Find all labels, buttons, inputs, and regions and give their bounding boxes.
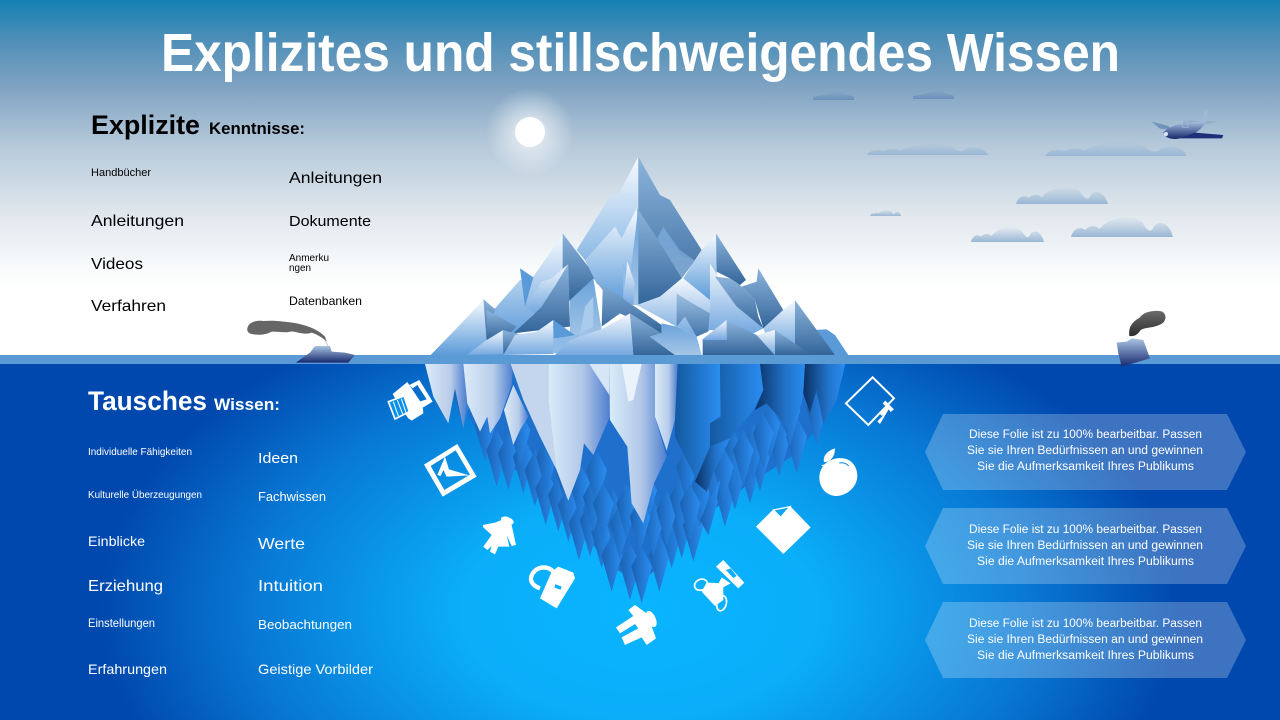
right dark ice columns bbox=[675, 364, 721, 480]
callout 2: Diese Folie ist zu 100% bearbeitbar. Passen bbox=[969, 524, 1202, 536]
item: Datenbanken bbox=[289, 294, 362, 308]
callout 2: Sie die Aufmerksamkeit Ihres Publikums bbox=[977, 556, 1194, 568]
item: Beobachtungen bbox=[258, 617, 352, 632]
background: white lower sky bbox=[0, 289, 1280, 357]
title: Explizites und stillschweigendes Wissen bbox=[161, 23, 1120, 83]
item bbox=[289, 253, 329, 274]
subheading: tacit: Wissen: bbox=[214, 395, 280, 414]
callout 1: Sie sie Ihren Bedürfnissen an und gewinnen bbox=[967, 445, 1203, 457]
background: sea bbox=[0, 363, 1280, 720]
horizon band bbox=[0, 355, 1280, 364]
callout 3: Sie sie Ihren Bedürfnissen an und gewinnen bbox=[967, 634, 1203, 646]
item: Anmerku bbox=[289, 253, 329, 264]
icon: trophy bbox=[693, 560, 744, 612]
main peak dark face bbox=[638, 157, 702, 305]
item: Erziehung bbox=[88, 578, 163, 595]
icon: apple bbox=[819, 448, 857, 496]
icon: airplane bbox=[1152, 108, 1223, 139]
item: Werte bbox=[258, 536, 305, 553]
front ice blocks bbox=[467, 330, 503, 355]
icon: monitor bbox=[846, 377, 894, 425]
heading: tacit: Tausches bbox=[88, 386, 207, 416]
item: Einblicke bbox=[88, 533, 145, 549]
item: Intuition bbox=[258, 578, 323, 595]
item: Anleitungen bbox=[289, 170, 382, 187]
panel: tacit knowledge bbox=[88, 386, 373, 677]
callout 1: Diese Folie ist zu 100% bearbeitbar. Passen bbox=[969, 429, 1202, 441]
iceberg above water bbox=[431, 157, 848, 355]
main peak light face bbox=[577, 157, 638, 305]
callout 3: Diese Folie ist zu 100% bearbeitbar. Passen bbox=[969, 618, 1202, 630]
dark shards bbox=[453, 367, 835, 603]
item: Ideen bbox=[258, 450, 298, 467]
subheading: explicit: Kenntnisse: bbox=[209, 119, 305, 138]
icon: envelope diamond bbox=[756, 507, 811, 554]
left ship with smoke bbox=[247, 321, 355, 363]
icon: person with dress bbox=[483, 515, 516, 554]
light ice shards bbox=[425, 364, 467, 428]
item: Geistige Vorbilder bbox=[258, 661, 373, 677]
left notch bbox=[520, 268, 533, 307]
background: sky bbox=[0, 0, 1280, 290]
right ship with smoke bbox=[1117, 311, 1165, 367]
mid left ridge bbox=[525, 264, 568, 313]
item: Handbücher bbox=[91, 167, 151, 179]
inner peak light bbox=[585, 208, 638, 305]
callout 3: Sie die Aufmerksamkeit Ihres Publikums bbox=[977, 650, 1194, 662]
callout 2: Sie sie Ihren Bedürfnissen an und gewinnen bbox=[967, 540, 1203, 552]
clouds bbox=[813, 91, 1187, 242]
item: Individuelle Fähigkeiten bbox=[88, 446, 192, 458]
panel: explicit knowledge bbox=[91, 110, 382, 315]
left shoulder dark bbox=[563, 233, 596, 302]
icon: person with shirt bbox=[616, 605, 659, 645]
left shoulder light bbox=[487, 233, 563, 340]
callout 1 bbox=[925, 414, 1246, 490]
item: Anleitungen bbox=[91, 213, 184, 230]
icon: padlock bbox=[531, 567, 575, 608]
far right slope bbox=[813, 329, 848, 355]
item: Erfahrungen bbox=[88, 661, 167, 677]
icon: checkbox bbox=[424, 444, 477, 497]
left base slope bbox=[431, 300, 520, 355]
item: Dokumente bbox=[289, 213, 371, 230]
callout 3 bbox=[925, 602, 1246, 678]
iceberg underwater backing bbox=[425, 364, 845, 580]
callout 1: Sie die Aufmerksamkeit Ihres Publikums bbox=[977, 461, 1194, 473]
iceberg below water bbox=[425, 364, 845, 603]
item: Einstellungen bbox=[88, 616, 155, 630]
callout 2 bbox=[925, 508, 1246, 584]
heading: explicit: Explizite bbox=[91, 110, 200, 140]
item: Fachwissen bbox=[258, 489, 326, 504]
item: Kulturelle Überzeugungen bbox=[88, 489, 202, 501]
centre ridge bbox=[570, 278, 602, 340]
icon: printer bbox=[388, 380, 433, 421]
item: ngen bbox=[289, 263, 311, 274]
item: Videos bbox=[91, 256, 143, 273]
right shoulder bbox=[683, 233, 717, 300]
item: Verfahren bbox=[91, 298, 166, 315]
sun bbox=[486, 88, 574, 176]
